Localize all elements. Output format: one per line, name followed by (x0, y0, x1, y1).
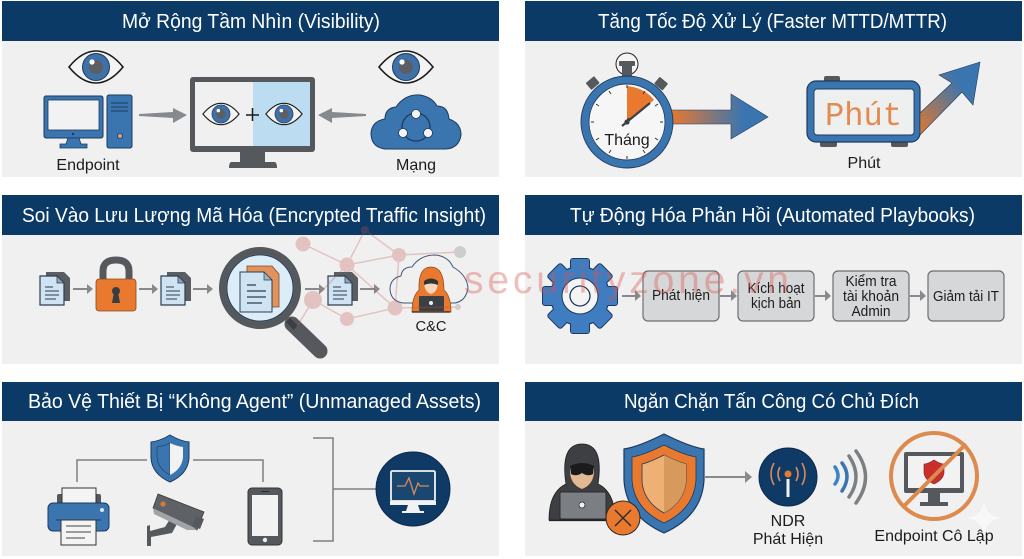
step: Kích hoạt kịch bản (738, 271, 814, 321)
step: Giảm tải IT (928, 271, 1004, 321)
icon: C&C cloud with hacker: C&C (416, 318, 447, 335)
panel: unmanaged assets (2, 382, 499, 556)
icon: smartphone (248, 488, 282, 545)
connector lines (77, 460, 263, 482)
icon: desktop computer (44, 95, 132, 148)
step: Kiểm tra tài khoản Admin: tài khoản (843, 288, 899, 305)
label: NDR Phát Hiện: NDR (771, 513, 805, 530)
panel: visibility (2, 1, 499, 177)
heading: faster MTTD/MTTR: Tăng Tốc Độ Xử Lý (Faster MTTD/MTTR) (598, 11, 947, 33)
label: NDR Phát Hiện (753, 513, 823, 548)
arrow to step 3 (815, 290, 831, 301)
icon: magnifier over documents (223, 251, 320, 351)
heading: faster MTTD/MTTR (525, 1, 1022, 41)
icon: endpoint eye (69, 51, 123, 83)
arrow to step 2 (720, 290, 737, 301)
heading: automated playbooks (525, 195, 1022, 235)
icon: network cloud (371, 95, 461, 149)
icon: document 1 (40, 272, 70, 305)
icon: security camera (147, 494, 204, 546)
heading: unmanaged assets (2, 382, 499, 421)
panel: faster MTTD/MTTR (525, 1, 1022, 177)
arrow to step 4 (910, 290, 926, 301)
step: Kiểm tra tài khoản Admin (833, 271, 909, 321)
step: Giảm tải IT: Giảm tải IT (933, 288, 999, 305)
arrow 5 (360, 284, 380, 294)
heading: targeted attack prevention: Ngăn Chặn Tấn Công Có Chủ Đích (624, 391, 919, 413)
panel: targeted attack prevention (525, 382, 1022, 556)
arrow to step 1 (622, 290, 641, 301)
label: Endpoint: Endpoint (56, 157, 120, 174)
heading: encrypted traffic insight (2, 195, 499, 235)
arrow 4 (305, 284, 325, 294)
step: Kiểm tra tài khoản Admin: Admin (852, 303, 890, 320)
label: Mạng: Mạng (396, 157, 436, 174)
icon: padlock (96, 260, 136, 311)
label: NDR Phát Hiện: Phát Hiện (753, 531, 823, 548)
icon: printer (48, 488, 109, 545)
arrow: months to minutes (670, 94, 768, 139)
icon: C&C cloud with hacker (390, 255, 468, 335)
label: Endpoint Cô Lập: Endpoint Cô Lập (874, 528, 994, 545)
watermark: site name: securityzone.vn (464, 259, 789, 302)
icon: network eye (379, 51, 433, 83)
heading: automated playbooks: Tự Động Hóa Phản Hồi (Automated Playbooks) (570, 205, 975, 227)
arrow: endpoint to console (139, 108, 187, 123)
icon: document 2 (161, 272, 191, 305)
arrow: upward trend (920, 62, 980, 135)
icon: stopwatch (581, 53, 673, 168)
icon: document 3 (328, 272, 358, 305)
icon: sparkle mark (967, 501, 1001, 535)
heading: visibility: Mở Rộng Tầm Nhìn (Visibility) (122, 11, 380, 33)
heading: targeted attack prevention (525, 382, 1022, 421)
heading: unmanaged assets: Bảo Vệ Thiết Bị “Không Agent” (Unmanaged Assets) (28, 391, 481, 413)
icon: half shield (151, 435, 189, 482)
bracket connector (313, 438, 377, 541)
icon: hooded hacker (549, 444, 615, 520)
icon: digital clock: Phút (825, 98, 902, 135)
icon: signal waves (835, 451, 866, 503)
icon: blocked X (606, 501, 640, 535)
heading: visibility (2, 1, 499, 41)
panel: encrypted traffic insight (2, 195, 499, 364)
step: Phát hiện: Phát hiện (652, 287, 710, 304)
step: Kích hoạt kịch bản: kịch bản (751, 295, 801, 312)
arrow: shield to NDR (704, 471, 752, 483)
arrow 3 (193, 284, 213, 294)
label: Phút: Phút (848, 155, 881, 172)
arrow 1 (73, 284, 93, 294)
step: Kiểm tra tài khoản Admin: Kiểm tra (846, 273, 897, 290)
icon: stopwatch: Tháng (604, 132, 650, 149)
icon: console monitor (190, 77, 315, 168)
step: Kích hoạt kịch bản: Kích hoạt (748, 280, 805, 297)
step: Phát hiện (643, 271, 719, 321)
panel: automated playbooks (525, 195, 1022, 364)
watermark: network graph (295, 226, 466, 330)
heading: encrypted traffic insight: Soi Vào Lưu Lượng Mã Hóa (Encrypted Traffic Insight) (22, 205, 486, 227)
arrow 2 (139, 284, 158, 294)
icon: digital clock (807, 76, 920, 147)
arrow: network to console (318, 108, 366, 123)
icon: isolated endpoint (891, 433, 977, 519)
icon: NDR sensor (759, 448, 817, 506)
icon: gear (543, 259, 617, 333)
icon: layered shield (624, 434, 704, 533)
icon: monitoring console (376, 452, 450, 526)
